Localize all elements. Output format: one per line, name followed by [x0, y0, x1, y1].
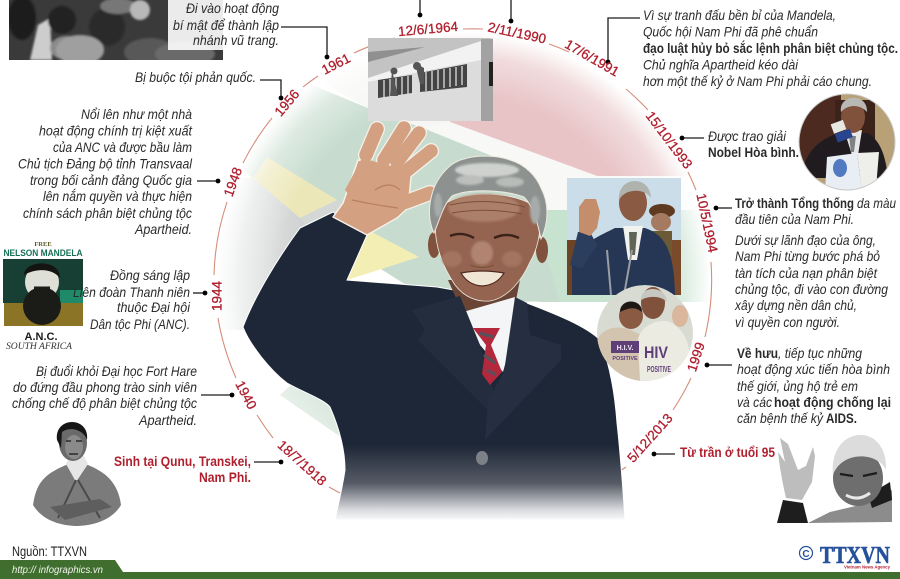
photo: HIV positive: POSITIVE — [612, 356, 638, 362]
Nobel photo outline — [799, 94, 895, 190]
text: 1948: Chủ tịch Đảng bộ tỉnh Transvaal — [18, 156, 193, 172]
timeline date labels: 18/7/1918 — [275, 437, 329, 489]
logo: TTXVN: Vietnam News Agency — [844, 564, 890, 570]
hair — [429, 156, 547, 239]
timeline date labels: 5/12/2013 — [624, 411, 676, 465]
photo: young Mandela — [33, 422, 121, 526]
eyes — [450, 234, 519, 238]
text: 1948 — [18, 106, 193, 237]
poster: Free Nelson Mandela: FREE — [34, 241, 52, 248]
text: 1944: Dân tộc Phi (ANC). — [90, 316, 190, 332]
timeline date labels: 1999 — [684, 340, 708, 374]
text: 1999: thế giới, ủng hộ trẻ em — [737, 378, 858, 394]
timeline date labels: 10/5/1994 — [693, 192, 721, 254]
source: Nguồn: TTXVN — [12, 544, 87, 559]
photo: president at podium — [567, 178, 681, 295]
text: 1999: và các — [737, 394, 772, 410]
text: birth: Sinh tại Qunu, Transkei, — [114, 453, 251, 469]
text: 1993: Nobel Hòa bình. — [708, 144, 799, 160]
logo: TTXVN — [800, 543, 891, 570]
timeline date labels: 12/6/1964 — [397, 19, 459, 39]
main portrait of Mandela — [243, 128, 625, 520]
shirt — [463, 297, 515, 372]
left lapel — [412, 296, 493, 410]
text: 1999: Về hưu — [737, 345, 778, 361]
timeline date labels: 17/6/1991 — [562, 36, 622, 80]
text: death: Từ trần ở tuổi 95 — [680, 444, 775, 460]
connectors — [193, 0, 732, 464]
text: 1994: Nam Phi từng bước phá bỏ — [735, 248, 880, 264]
text: 1994: tàn tích của nạn phân biệt — [735, 265, 878, 281]
text: 1999: , tiếp tục những — [778, 345, 862, 361]
photo: Nobel prize — [799, 94, 895, 192]
text: 1940: Bị đuổi khỏi Đại học Fort Hare — [36, 363, 197, 379]
background: faded South African flag — [231, 40, 704, 436]
text: 1999 — [737, 345, 891, 426]
suit — [243, 212, 625, 520]
poster: Free Nelson Mandela: SOUTH AFRICA — [6, 341, 73, 351]
text: 1948: chính sách phân biệt chủng tộc — [23, 205, 192, 221]
text: 1999: AIDS. — [826, 410, 857, 426]
photo: train window — [368, 38, 493, 121]
text: 1940 — [12, 363, 197, 428]
mouth — [461, 271, 504, 286]
timeline date labels: 1961 — [319, 50, 353, 78]
text: 1944: Liên đoàn Thanh niên — [73, 284, 190, 300]
text: 1940: Apartheid. — [138, 412, 197, 428]
text: 1961: Đi vào hoạt động — [186, 0, 279, 16]
neck — [448, 280, 520, 314]
ears — [428, 232, 440, 258]
timeline date labels: 1948 — [221, 165, 245, 199]
timeline date labels: 1956 — [272, 87, 302, 119]
text: 1961: bí mật để thành lập — [173, 17, 279, 33]
timeline date labels: 2/11/1990 — [487, 20, 547, 46]
text: 1991 — [643, 7, 898, 89]
hair highlight — [434, 163, 540, 224]
text: 1993 — [708, 128, 799, 160]
timeline date labels: 1944 — [210, 280, 224, 311]
text: 1948: Nổi lên như một nhà — [81, 106, 192, 122]
text: 1991: Quốc hội Nam Phi đã phê chuẩn — [643, 24, 818, 40]
right lapel — [485, 297, 561, 440]
tie — [473, 328, 502, 385]
timeline date labels: 15/10/1993 — [643, 109, 695, 171]
text: 1994: đầu tiên của Nam Phi. — [735, 211, 854, 227]
hand — [333, 128, 431, 235]
timeline date labels — [210, 19, 721, 489]
text: 1994: Trở thành Tổng thống — [735, 195, 854, 211]
text: 1994 — [734, 195, 896, 330]
text: 1991: Vì sự tranh đấu bền bỉ của Mandela, — [643, 7, 836, 23]
text: 1944 — [73, 267, 191, 332]
text: birth: Nam Phi. — [199, 469, 251, 485]
logo: TTXVN: C — [802, 549, 810, 560]
footer bar — [0, 560, 900, 579]
timeline arc — [214, 29, 712, 493]
text: 1994: xây dựng nền dân chủ, — [734, 297, 857, 313]
photo: HIV positive: H.I.V. — [617, 345, 633, 352]
text: 1961 — [173, 0, 279, 48]
face highlights — [442, 194, 522, 267]
text: 1948: lên nắm quyền và thực hiện — [43, 188, 192, 204]
text: 1961: nhánh vũ trang. — [193, 32, 279, 48]
photo: crowd at top left — [8, 0, 223, 66]
text: 1948: của ANC và được bầu làm — [53, 139, 192, 155]
face — [435, 194, 540, 301]
text: 1994: vì quyền con người. — [735, 314, 840, 330]
photo: HIV positive: POSITIVE — [647, 365, 671, 374]
photo: HIV positive — [597, 285, 693, 381]
text: 1991: Chủ nghĩa Apartheid kéo dài — [643, 56, 799, 72]
text: 1940: do đứng đầu phong trào sinh viên — [13, 379, 197, 395]
text: 1994: Dưới sự lãnh đạo của ông, — [735, 232, 876, 248]
poster: Free Nelson Mandela: NELSON MANDELA — [4, 248, 83, 259]
text: 1944: Đồng sáng lập — [110, 267, 190, 283]
poster: Free Nelson Mandela: A.N.C. — [24, 331, 58, 343]
timeline date labels: 1940 — [232, 378, 260, 412]
text: 1948: Apartheid. — [134, 221, 192, 237]
text: 1993: Được trao giải — [708, 128, 787, 144]
footer bar: http:// infographics.vn — [12, 564, 103, 576]
photo: older Mandela waving — [777, 435, 892, 523]
text: 1948: trong bối cảnh đảng Quốc gia — [30, 172, 192, 188]
text: 1956: Bị buộc tội phản quốc. — [135, 69, 256, 85]
button — [476, 451, 488, 465]
text: 1948: hoạt động chính trị kiệt xuất — [39, 122, 193, 138]
text: birth — [114, 453, 251, 485]
text: 1944: thuộc Đại hội — [117, 299, 191, 315]
text: 1999: căn bệnh thế kỷ — [737, 410, 824, 426]
photo: HIV positive: HIV — [644, 343, 669, 362]
text: 1940: chống chế độ phân biệt chủng tộc — [12, 395, 197, 411]
forehead wrinkles and nose — [450, 201, 525, 268]
poster: Free Nelson Mandela — [3, 241, 83, 351]
